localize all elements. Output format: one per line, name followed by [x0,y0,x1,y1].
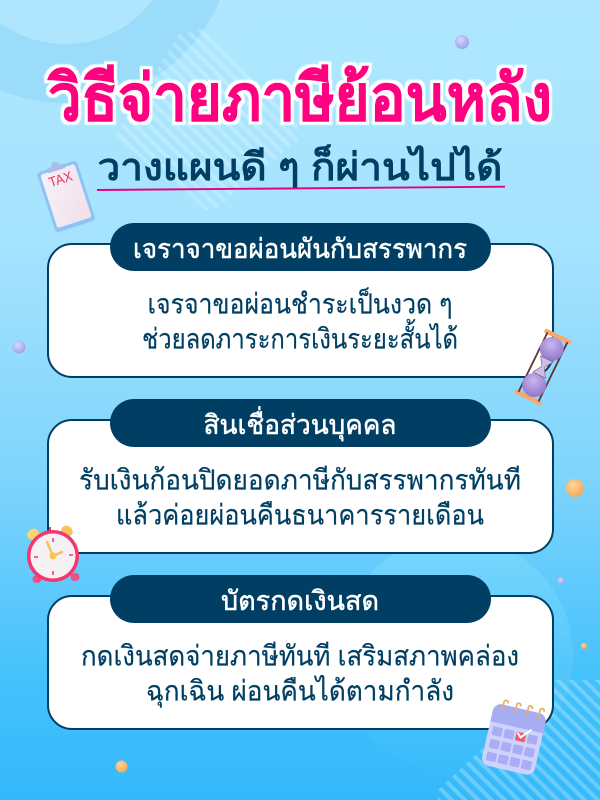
panel description: ช่วยลดภาระการเงินระยะสั้นได้ [142,318,458,354]
panel: cash card [48,575,553,729]
decorative dot: small orange [581,643,587,649]
icon: alarm clock [25,524,80,583]
panel heading text: สินเชื่อส่วนบุคคล [204,406,396,442]
panel description: รับเงินก้อนปิดยอดภาษีกับสรรพากรทันที [79,464,521,496]
icon: calendar [480,698,548,776]
subtitle: วางแผนดี ๆ ก็ผ่านไปได้ [98,144,502,189]
panel description: เจรจาขอผ่อนชำระเป็นงวด ๆ [148,286,452,320]
decorative dot: left lilac [12,340,26,354]
panel description: ฉุกเฉิน ผ่อนคืนได้ตามกำลัง [146,676,454,708]
decorative dot: small lilac [558,578,564,584]
panel heading text: บัตรกดเงินสด [221,586,379,616]
panel description: แล้วค่อยผ่อนคืนธนาคารรายเดือน [116,500,484,530]
panel description: กดเงินสดจ่ายภาษีทันที เสริมสภาพคล่อง [81,640,519,672]
panel: personal loan [48,399,553,553]
panel heading pill [110,223,491,271]
panel heading text: เจราจาขอผ่อนผันกับสรรพากร [133,234,467,264]
panel: negotiate installments [48,223,553,377]
decorative dot: bottom orange [116,760,128,772]
icon: tax clipboard: TAX [47,167,75,190]
panel body [48,244,553,377]
decorative dot: right orange [566,479,584,497]
decorative dot: top lilac [455,35,469,49]
panel heading pill [110,399,491,447]
panel description [142,286,458,354]
subtitle underline [97,186,505,191]
panel description [81,640,519,708]
panel heading pill [110,575,491,623]
title: วิธีจ่ายภาษีย้อนหลัง [47,62,552,134]
panel body [48,596,553,729]
panel body [48,420,553,553]
panel description [79,464,521,530]
icon: tax clipboard [35,155,96,233]
icon: hourglass [514,328,572,406]
